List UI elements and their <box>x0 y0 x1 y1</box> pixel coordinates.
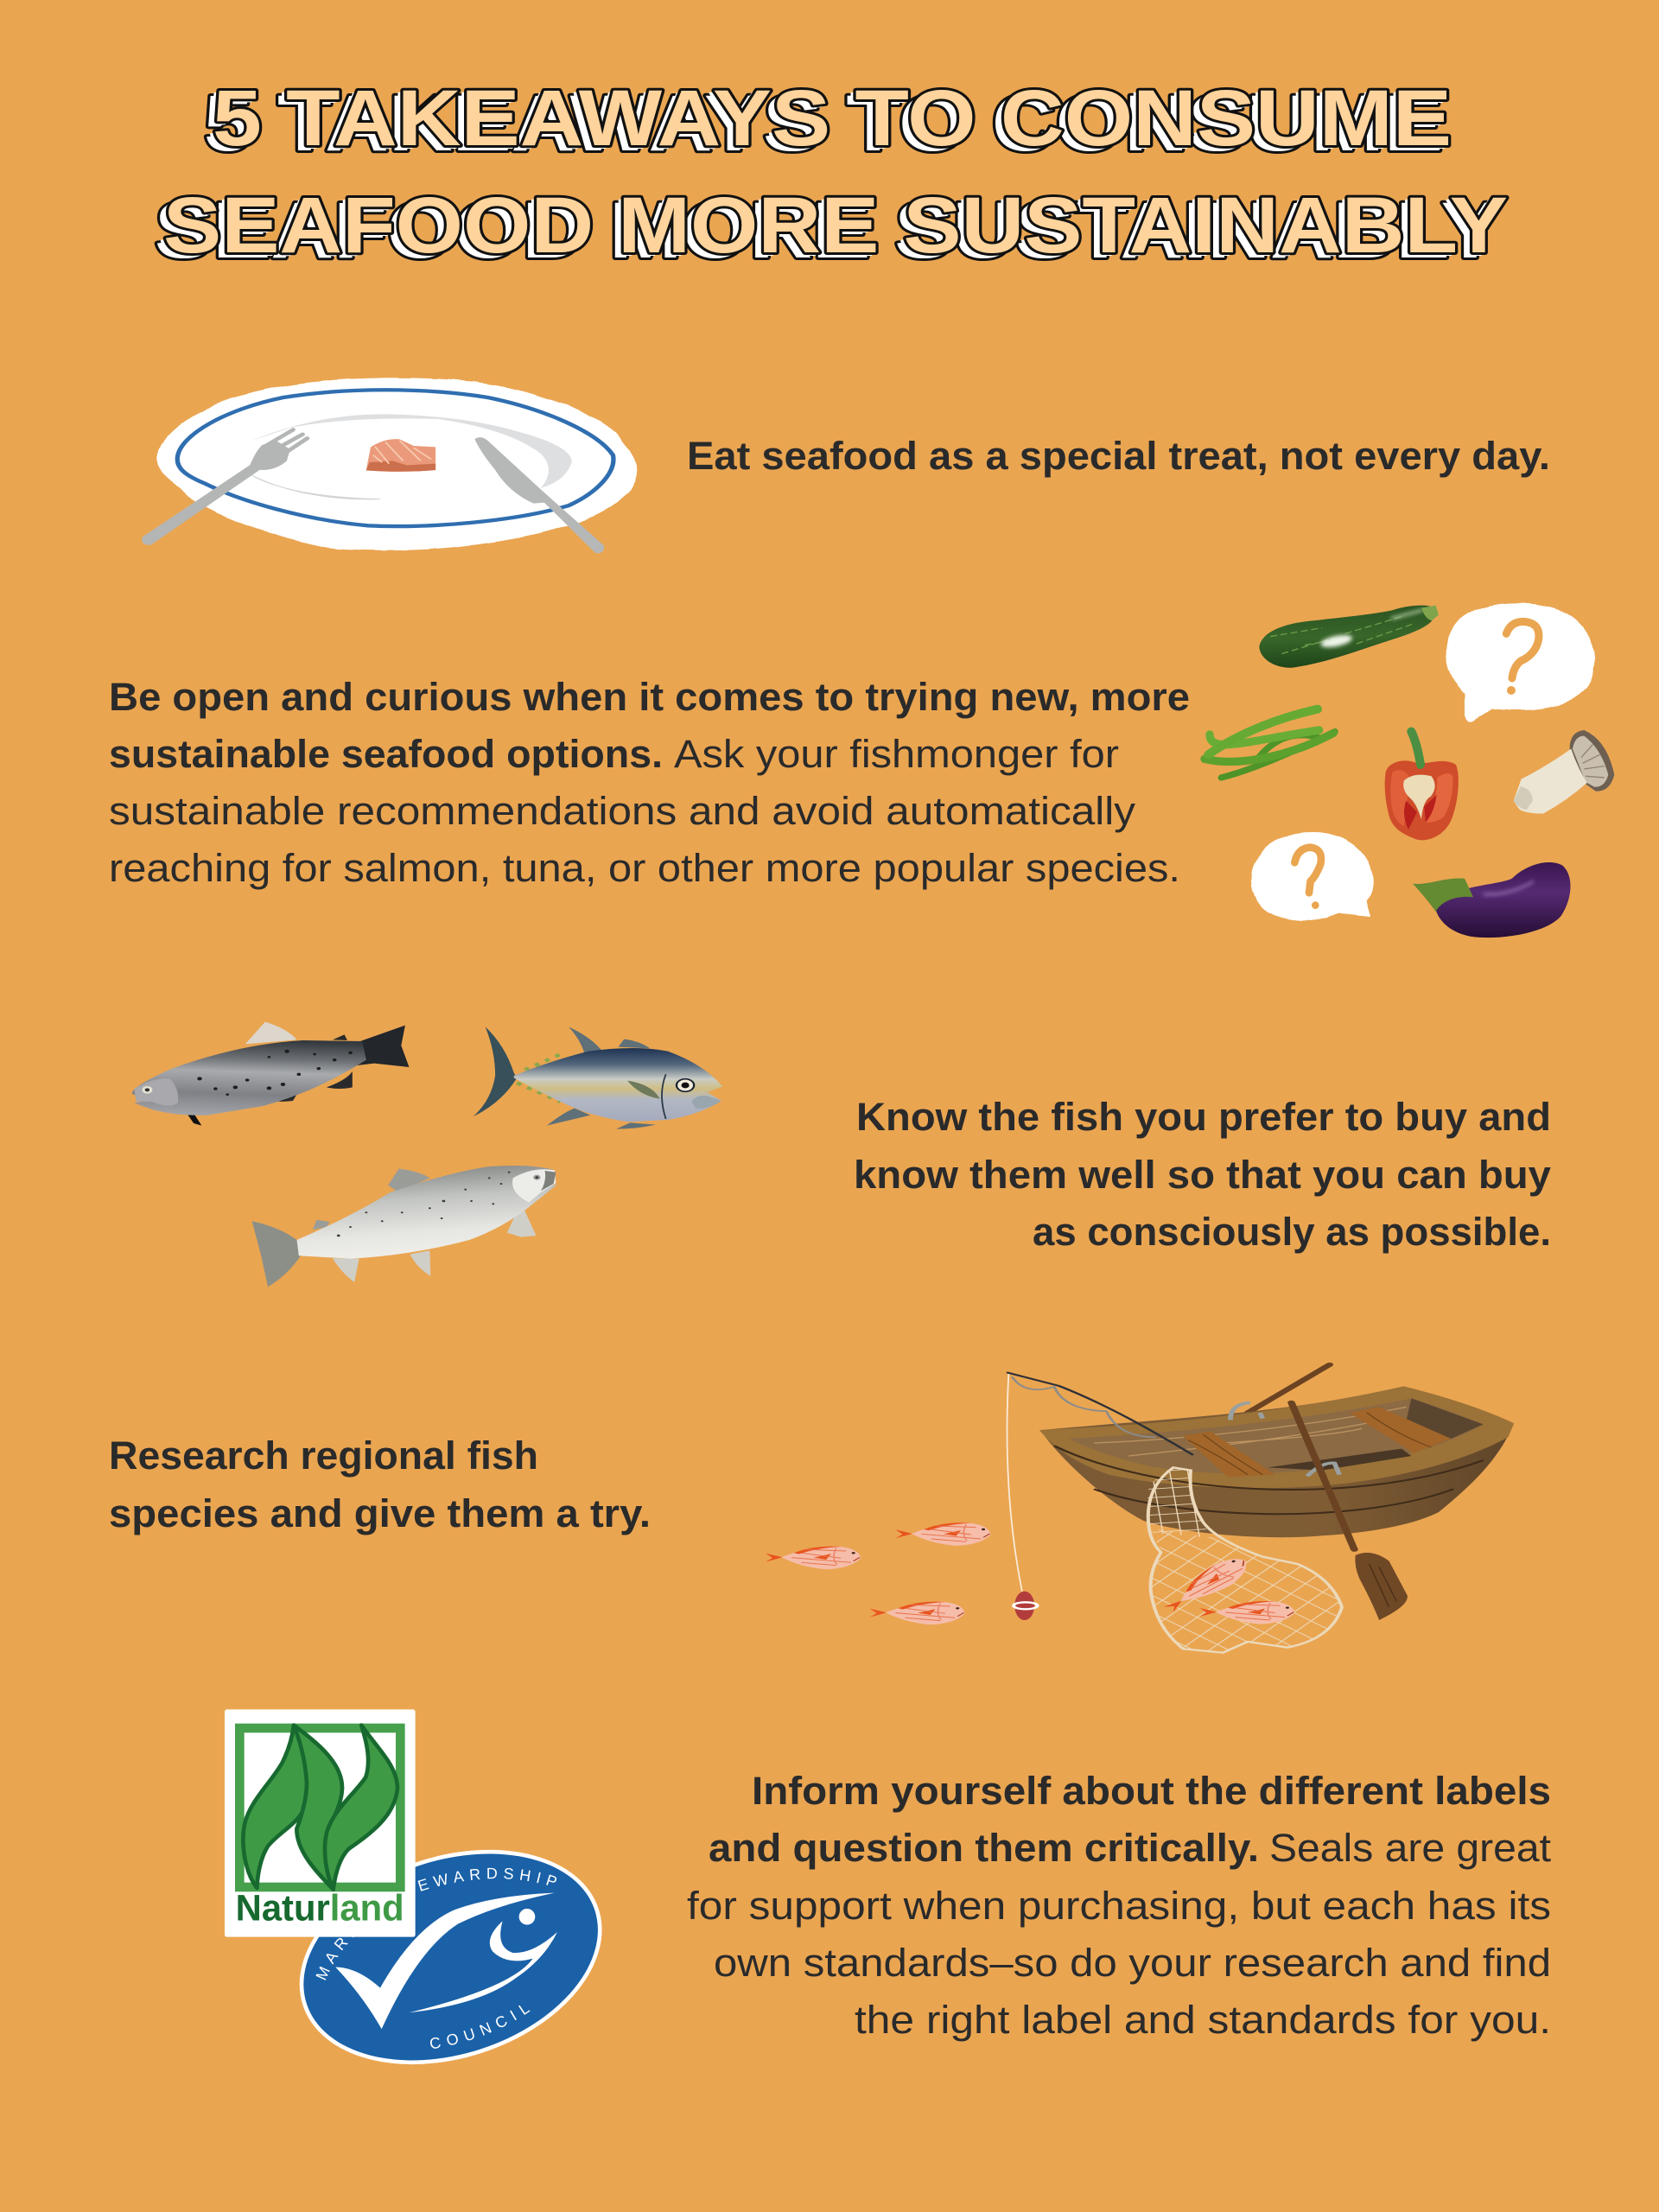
salmon fillet <box>366 439 435 472</box>
logo: Marine Stewardship Council <box>299 1849 602 2065</box>
plate <box>156 378 637 550</box>
text: tip 3: know them well so that you can buy <box>854 1153 1551 1197</box>
text: tip 2: sustainable recommendations and avoid automatically <box>109 789 1136 833</box>
illustration: sustainability labels <box>225 1709 602 2065</box>
text: tip 2: Ask your fishmonger for <box>674 732 1119 776</box>
title: 5 TAKEAWAYS TO CONSUME <box>204 79 1443 168</box>
red pepper <box>1385 732 1459 840</box>
tuna <box>474 1027 722 1129</box>
mushroom <box>1514 730 1614 814</box>
green beans <box>1205 709 1335 778</box>
text: tip 4: Research regional fish <box>109 1433 538 1478</box>
title: SEAFOOD MORE SUSTAINABLY <box>159 184 1503 272</box>
small fish <box>766 1522 991 1624</box>
text: tip 3: Know the fish you prefer to buy and <box>856 1095 1551 1139</box>
knife <box>474 437 604 553</box>
title <box>155 74 1508 275</box>
text: tip 2: Be open and curious when it comes to trying new, more <box>109 675 1190 719</box>
question bubble: top right <box>1446 603 1595 722</box>
text: tip 5: Inform yourself about the different labels <box>752 1769 1551 1813</box>
plate rim <box>177 390 613 526</box>
oar <box>1292 1402 1408 1620</box>
illustration: vegetables and question bubbles <box>1205 603 1614 938</box>
plate shading <box>251 414 572 488</box>
illustration: plate with salmon, fork and knife <box>142 378 637 553</box>
fork <box>142 429 308 545</box>
logo: Marine Stewardship Council: MARINE STEWARDSHIP <box>316 1868 556 1980</box>
text: tip 3 <box>854 1095 1551 1254</box>
logo: Naturland: Naturland <box>236 1888 404 1929</box>
text: tip 2 <box>109 675 1190 890</box>
text: tip 1: Eat seafood as a special treat, not every day. <box>687 434 1550 478</box>
illustration: three fish <box>132 1022 722 1287</box>
title: 5 TAKEAWAYS TO CONSUME <box>208 77 1447 165</box>
text: tip 4: species and give them a try. <box>109 1491 651 1535</box>
text: tip 2: sustainable seafood options. <box>109 732 663 776</box>
fishing rod and line <box>1007 1372 1193 1592</box>
text: tip 5: the right label and standards for you. <box>855 1998 1551 2042</box>
logo: Naturland <box>225 1709 416 1937</box>
text: tip 5: and question them critically. <box>709 1826 1259 1870</box>
zucchini <box>1259 606 1439 668</box>
text: tip 2: reaching for salmon, tuna, or other more popular species. <box>109 846 1180 890</box>
plate shading: lower stroke <box>251 475 380 499</box>
question bubble: bottom left <box>1251 832 1374 921</box>
boat oar back <box>1248 1364 1330 1413</box>
text: tip 5: own standards–so do your research and find <box>714 1941 1551 1985</box>
eggplant <box>1413 862 1570 938</box>
float <box>1014 1592 1038 1620</box>
text: tip 5: Seals are great <box>1269 1826 1552 1870</box>
landing net <box>1147 1467 1342 1653</box>
title: 5 TAKEAWAYS TO CONSUME <box>213 74 1452 162</box>
salmon <box>252 1166 557 1287</box>
title: SEAFOOD MORE SUSTAINABLY <box>163 181 1508 270</box>
boat <box>1039 1386 1514 1537</box>
trout <box>132 1022 409 1126</box>
text: tip 5 <box>687 1769 1552 2042</box>
text: tip 3: as consciously as possible. <box>1033 1210 1551 1254</box>
illustration: boat, fishing rod, net and fish <box>766 1364 1514 1653</box>
text: tip 5: for support when purchasing, but each has its <box>687 1884 1551 1928</box>
logo: Marine Stewardship Council: COUNCIL <box>430 2005 531 2049</box>
title: SEAFOOD MORE SUSTAINABLY <box>155 187 1499 275</box>
text: tip 4 <box>109 1433 651 1535</box>
